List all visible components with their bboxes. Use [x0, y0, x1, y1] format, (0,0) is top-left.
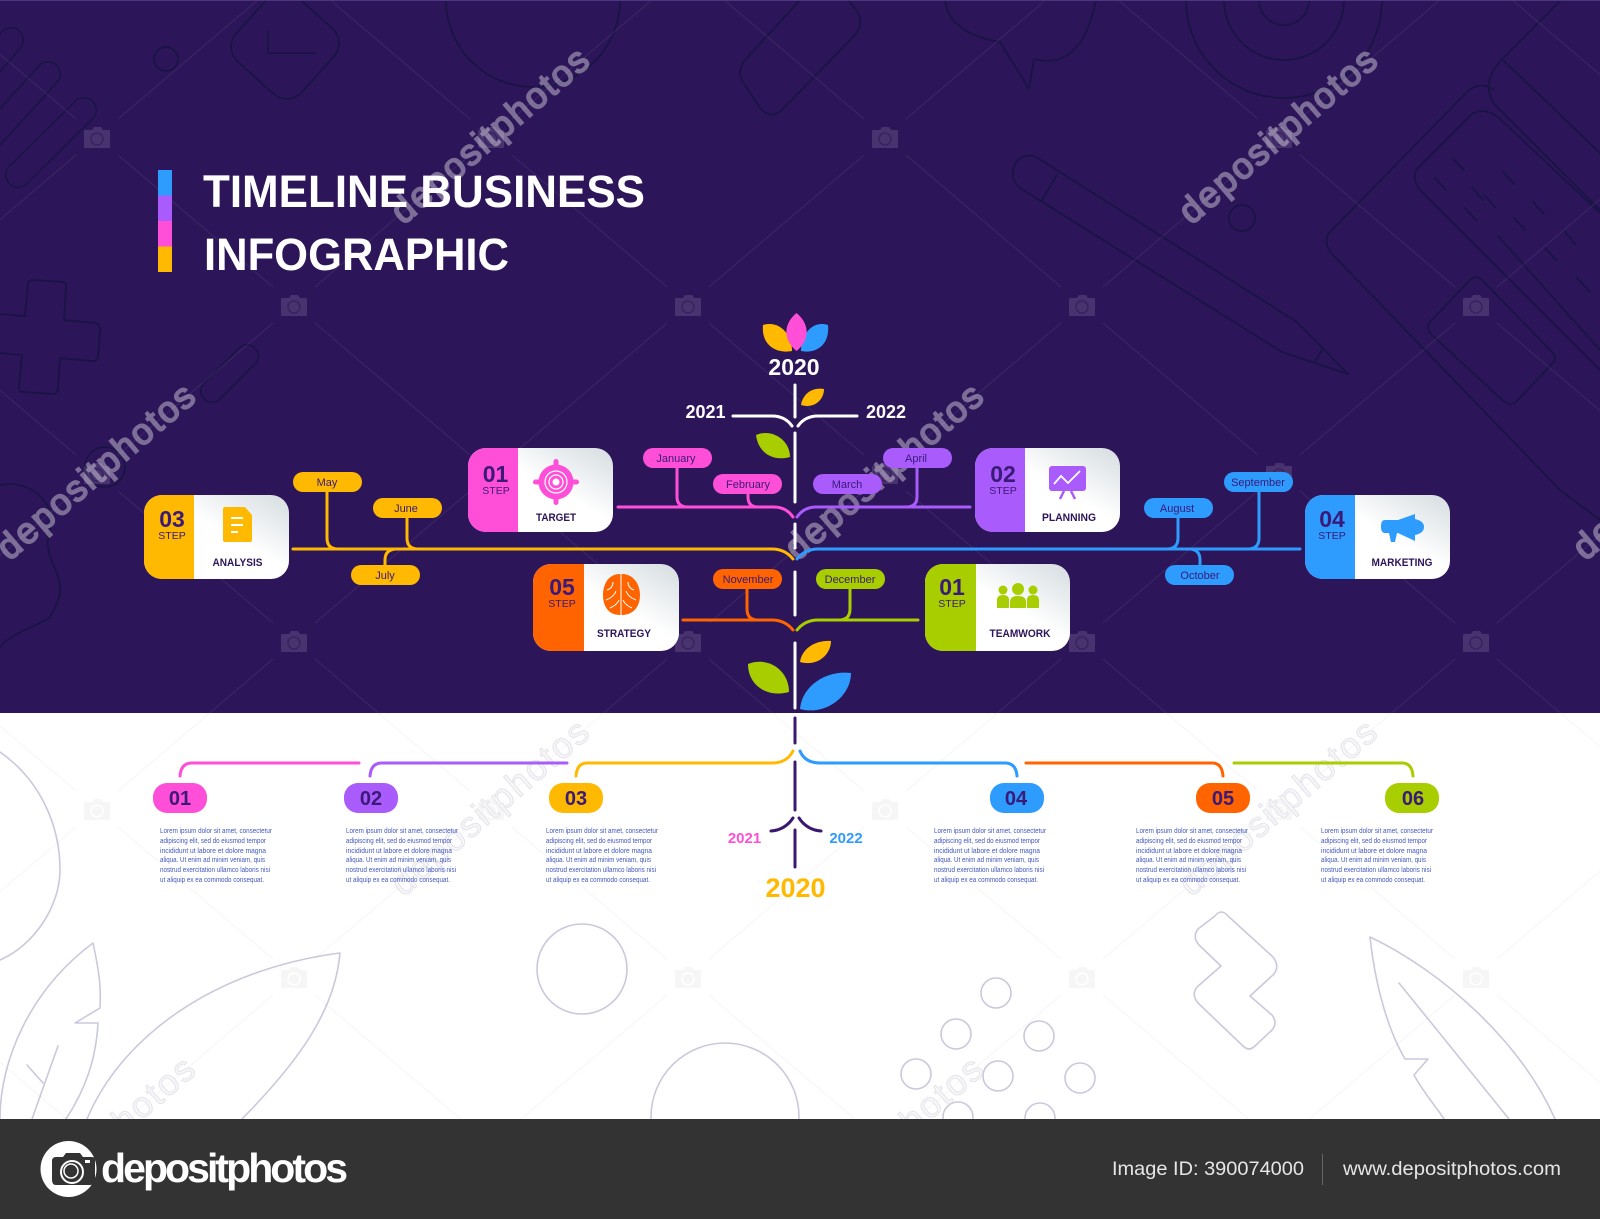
watermarks on dark — [0, 39, 1600, 568]
panel: planning card: PLANNING — [1042, 512, 1096, 524]
panel: strategy card — [533, 564, 679, 651]
watermarks on white — [0, 711, 1385, 1219]
branch: orange November: November — [723, 574, 774, 586]
panel: analysis card: STEP — [158, 530, 186, 542]
text block 04 — [934, 828, 1047, 884]
text block 01: ut aliquip ex ea commodo consequat. — [160, 877, 264, 884]
white lower background — [0, 713, 1600, 1119]
year branches 2021 2022: 2021 — [685, 402, 726, 422]
panel: strategy card: STRATEGY — [597, 628, 652, 640]
text block 06: Lorem ipsum dolor sit amet, consectetur — [1321, 828, 1434, 835]
text block 05: Lorem ipsum dolor sit amet, consectetur — [1136, 828, 1249, 835]
text block 03: Lorem ipsum dolor sit amet, consectetur — [546, 828, 659, 835]
background outline doodles on white — [0, 751, 1556, 1119]
icon: document — [223, 507, 252, 542]
watermarks on dark: depositphotos — [382, 39, 597, 232]
text block 04: Lorem ipsum dolor sit amet, consectetur — [934, 828, 1047, 835]
panel: teamwork card: STEP — [938, 598, 966, 610]
divider — [1322, 1154, 1323, 1185]
text block 06: aliqua. Ut enim ad minim veniam, quis — [1321, 857, 1426, 864]
step 05 connector and badge: 05 — [1212, 788, 1234, 810]
panel: target card: STEP — [482, 485, 510, 497]
branch: pink January February: January — [656, 453, 696, 465]
step 06 connector and badge — [1234, 763, 1439, 813]
text block 02: Lorem ipsum dolor sit amet, consectetur — [346, 828, 459, 835]
panel: teamwork card: 01 — [939, 574, 965, 600]
panel: planning card — [975, 448, 1120, 532]
title: INFOGRAPHIC — [204, 229, 509, 280]
footer bar — [0, 1119, 1600, 1219]
lower year labels — [728, 830, 863, 903]
background outline doodles on dark — [0, 0, 1600, 647]
text block 03: incididunt ut labore et dolore magna — [546, 848, 652, 855]
step 01 connector and badge: 01 — [169, 788, 191, 810]
step 01 connector and badge — [153, 763, 359, 813]
text block 03: adipiscing elit, sed do eiusmod tempor — [546, 838, 653, 845]
icon: presentation board — [1049, 466, 1086, 499]
icon: brain — [603, 574, 640, 615]
panel: marketing card — [1305, 495, 1450, 579]
text block 01: incididunt ut labore et dolore magna — [160, 848, 266, 855]
central white axis — [794, 385, 796, 708]
text block 02: ut aliquip ex ea commodo consequat. — [346, 877, 450, 884]
icon: megaphone — [1381, 514, 1424, 542]
text block 02: aliqua. Ut enim ad minim veniam, quis — [346, 857, 451, 864]
panel: analysis card: ANALYSIS — [212, 557, 262, 569]
panel: strategy card: 05 — [549, 574, 575, 600]
panel: planning card: STEP — [989, 485, 1017, 497]
icon: lotus — [763, 313, 828, 352]
text block 06: ut aliquip ex ea commodo consequat. — [1321, 877, 1425, 884]
watermarks on white: depositphotos — [382, 711, 597, 904]
panel: target card: TARGET — [536, 512, 576, 524]
text block 05: nostrud exercitation ullamco laboris nisi — [1136, 867, 1246, 874]
footer brand name: depositphotos — [101, 1145, 348, 1191]
text block 01 — [160, 828, 273, 884]
step 04 connector and badge — [800, 751, 1044, 813]
branch: blue August September October: September — [1231, 477, 1285, 489]
branch: yellow May June July: May — [317, 477, 338, 489]
text block 04: nostrud exercitation ullamco laboris nisi — [934, 867, 1044, 874]
text block 05 — [1136, 828, 1249, 884]
watermark grid on white — [0, 713, 1600, 1119]
lower axis — [794, 718, 796, 867]
step 02 connector and badge — [344, 763, 567, 813]
text block 01: Lorem ipsum dolor sit amet, consectetur — [160, 828, 273, 835]
watermark grid on dark — [0, 0, 1600, 713]
watermarks on dark: depositphotos — [776, 375, 991, 568]
text block 04: aliqua. Ut enim ad minim veniam, quis — [934, 857, 1039, 864]
panel: target card: 01 — [483, 461, 508, 487]
step 03 connector and badge — [549, 751, 793, 813]
text block 05: ut aliquip ex ea commodo consequat. — [1136, 877, 1240, 884]
text block 03: nostrud exercitation ullamco laboris nisi — [546, 867, 656, 874]
watermarks on dark: depositphotos — [1170, 39, 1385, 232]
text block 04: adipiscing elit, sed do eiusmod tempor — [934, 838, 1041, 845]
step 05 connector and badge — [1026, 763, 1250, 813]
text block 03: ut aliquip ex ea commodo consequat. — [546, 877, 650, 884]
panel: planning card: 02 — [990, 461, 1016, 487]
year 2020 heading: 2020 — [768, 354, 820, 380]
text block 01: adipiscing elit, sed do eiusmod tempor — [160, 838, 267, 845]
top edge line — [0, 0, 1600, 1]
branch: blue August September October: August — [1160, 503, 1194, 515]
title — [203, 166, 645, 280]
text block 06: adipiscing elit, sed do eiusmod tempor — [1321, 838, 1428, 845]
text block 01: aliqua. Ut enim ad minim veniam, quis — [160, 857, 265, 864]
text block 02: incididunt ut labore et dolore magna — [346, 848, 452, 855]
branch: green December: December — [825, 574, 876, 586]
text block 04: ut aliquip ex ea commodo consequat. — [934, 877, 1038, 884]
branch: orange November — [683, 569, 793, 630]
panel: marketing card: 04 — [1319, 506, 1345, 532]
branch: blue August September October — [797, 472, 1300, 585]
panel: teamwork card: TEAMWORK — [990, 628, 1051, 640]
text block 03 — [546, 828, 659, 884]
step 03 connector and badge: 03 — [565, 788, 587, 810]
lower year labels: 2020 — [765, 873, 826, 903]
branch: purple March April: March — [832, 479, 862, 491]
step 02 connector and badge: 02 — [360, 788, 382, 810]
leaves — [748, 389, 851, 710]
text block 02: adipiscing elit, sed do eiusmod tempor — [346, 838, 453, 845]
lower year labels: 2021 — [728, 830, 761, 847]
title colour bar — [158, 170, 172, 272]
image id: Image ID: 390074000 — [1112, 1158, 1304, 1180]
panel: marketing card: STEP — [1318, 530, 1346, 542]
branch: green December — [797, 569, 918, 630]
text block 03: aliqua. Ut enim ad minim veniam, quis — [546, 857, 651, 864]
icon: camera logo — [40, 1141, 96, 1197]
text block 05: aliqua. Ut enim ad minim veniam, quis — [1136, 857, 1241, 864]
text block 06: nostrud exercitation ullamco laboris nisi — [1321, 867, 1431, 874]
icon: team — [997, 583, 1039, 608]
text block 04: incididunt ut labore et dolore magna — [934, 848, 1040, 855]
watermarks on white: depositphotos — [1170, 711, 1385, 904]
branch: yellow May June July: June — [394, 503, 418, 515]
branch: purple March April: April — [905, 453, 927, 465]
year branches 2021 2022: 2022 — [866, 402, 906, 422]
text block 06: incididunt ut labore et dolore magna — [1321, 848, 1427, 855]
branch: blue August September October: October — [1180, 570, 1220, 582]
text block 02 — [346, 828, 459, 884]
panel: teamwork card — [925, 564, 1070, 651]
step 04 connector and badge: 04 — [1005, 788, 1028, 810]
panel: marketing card: MARKETING — [1372, 557, 1432, 569]
branch: pink January February: February — [726, 479, 771, 491]
dark top background — [0, 0, 1600, 713]
panel: analysis card — [144, 495, 289, 579]
year branches 2021 2022 — [685, 402, 906, 426]
branch: purple March April — [797, 448, 970, 517]
panel: strategy card: STEP — [548, 598, 576, 610]
text block 02: nostrud exercitation ullamco laboris nisi — [346, 867, 456, 874]
text block 05: adipiscing elit, sed do eiusmod tempor — [1136, 838, 1243, 845]
icon: target — [536, 462, 576, 502]
text block 01: nostrud exercitation ullamco laboris nisi — [160, 867, 270, 874]
branch: pink January February — [618, 448, 793, 517]
branch: yellow May June July — [293, 472, 793, 585]
panel: analysis card: 03 — [159, 506, 185, 532]
text block 05: incididunt ut labore et dolore magna — [1136, 848, 1242, 855]
panel: target card — [468, 448, 613, 532]
title: TIMELINE BUSINESS — [203, 166, 645, 217]
branch: yellow May June July: July — [375, 570, 395, 582]
step 06 connector and badge: 06 — [1402, 788, 1424, 810]
lower year labels: 2022 — [829, 830, 863, 847]
website: www.depositphotos.com — [1342, 1158, 1561, 1180]
text block 06 — [1321, 828, 1434, 884]
lower axis branches — [771, 818, 821, 831]
